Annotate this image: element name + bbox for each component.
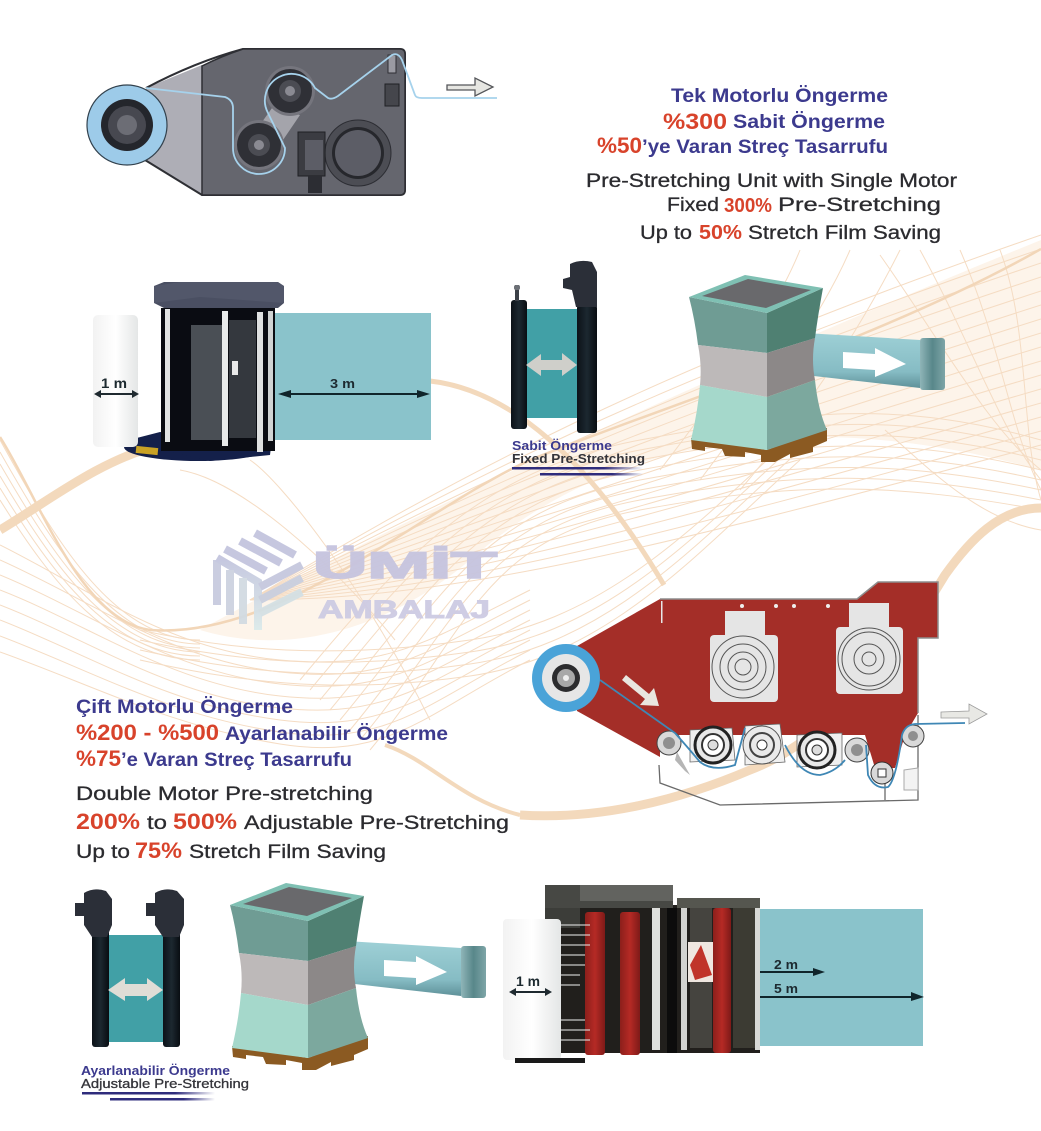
caption: adjustable pre-stretching (81, 1063, 249, 1100)
heading block: single motor (English): Stretch Film Saving (748, 223, 941, 244)
heading block: single motor (English): Up to (640, 223, 692, 244)
panel: wrapper machine with 3 m film (93, 282, 431, 461)
logo watermark: AMBALAJ (318, 596, 490, 624)
heading block: single motor (English): Pre-Stretching (778, 195, 941, 216)
arrow: film in (622, 675, 659, 706)
lower casing outline (659, 715, 918, 805)
film path (600, 680, 965, 788)
caption: adjustable pre-stretching: Ayarlanabilir Öngerme (81, 1063, 230, 1078)
icon: logo cube (217, 533, 302, 630)
caption: fixed pre-stretching (512, 438, 645, 476)
arrow: 1 m (94, 390, 139, 398)
arrow: double (108, 978, 163, 1001)
heading block: single motor (Turkish): %300 (663, 109, 727, 134)
arrow: film out (941, 704, 987, 724)
caption: fixed pre-stretching: Fixed Pre-Stretching (512, 451, 645, 466)
film sheet 5 m (760, 909, 923, 1046)
icon: film roll (87, 85, 167, 165)
label: 3 m: 3 m (330, 376, 355, 391)
arrow: 3 m (278, 390, 430, 398)
heading block: double motor (English): 75% (135, 838, 182, 863)
heading block: double motor (English): Double Motor Pre-stretching (76, 784, 373, 805)
heading block: double motor (Turkish) (76, 697, 448, 771)
logo watermark (217, 533, 498, 630)
red machine: double motor pre-stretching unit (532, 582, 987, 805)
panel: wrapped pallet with film strip, adjustable (230, 883, 486, 1070)
heading block: double motor (Turkish): %200 - %500 (76, 720, 219, 745)
heading block: single motor (Turkish) (597, 86, 888, 158)
logo watermark: ÜMİT (313, 545, 498, 586)
arrow: 5 m (760, 992, 924, 1001)
heading block: double motor (Turkish): Çift Motorlu Öngerme (76, 697, 293, 718)
panel: wrapped pallet with film strip, fixed (689, 275, 945, 462)
warning label (688, 942, 713, 982)
panel: fixed pre-stretching rollers (511, 261, 597, 433)
caption: adjustable pre-stretching: Adjustable Pre-Stretching (81, 1076, 249, 1091)
heading block: double motor (Turkish): %75 (76, 746, 121, 771)
heading block: single motor (English): 300% (724, 195, 772, 217)
panel: double motor machine with 5 m film (503, 885, 924, 1063)
icon: film roll 1 m (93, 315, 138, 447)
heading block: double motor (English): Stretch Film Saving (189, 842, 386, 863)
heading block: double motor (English): Adjustable Pre-Stretching (244, 813, 509, 834)
heading block: double motor (English): Up to (76, 842, 130, 863)
top machine: single motor pre-stretching unit (87, 49, 497, 195)
panel: adjustable pre-stretching rollers (75, 889, 184, 1047)
heading block: single motor (English) (586, 171, 958, 244)
arrow: 1 m (509, 988, 552, 996)
background wave lines (0, 235, 1041, 816)
rollers (657, 724, 924, 784)
heading block: single motor (Turkish): ’ye Varan Streç Tasarrufu (642, 137, 888, 158)
heading block: single motor (Turkish): Tek Motorlu Öngerme (671, 86, 888, 107)
heading block: double motor (Turkish): Ayarlanabilir Öngerme (225, 724, 448, 745)
motor 1 (710, 611, 778, 702)
label: 1 m: 1 m (101, 375, 127, 391)
heading block: double motor (English) (76, 784, 509, 863)
heading block: single motor (English): Pre-Stretching Unit with Single Motor (586, 171, 958, 192)
heading block: double motor (English): 200% (76, 809, 140, 834)
heading block: single motor (English): 50% (699, 222, 742, 244)
label: 1 m: 1 m (516, 973, 540, 989)
heading block: single motor (Turkish): %50 (597, 133, 642, 158)
heading block: single motor (English): Fixed (667, 195, 719, 216)
icon: film roll (532, 644, 600, 712)
motor 2 (836, 603, 903, 694)
caption: fixed pre-stretching: Sabit Öngerme (512, 438, 612, 453)
heading block: double motor (English): 500% (173, 809, 237, 834)
label: 2 m: 2 m (774, 957, 798, 972)
label: 5 m: 5 m (774, 981, 798, 996)
arrow: 2 m (760, 968, 825, 976)
arrow: double (526, 353, 577, 376)
heading block: double motor (English): to (147, 813, 167, 834)
film sheet 3 m (270, 313, 431, 440)
arrow (447, 78, 493, 96)
heading block: double motor (Turkish): ’e Varan Streç Tasarrufu (121, 750, 352, 771)
heading block: single motor (Turkish): Sabit Öngerme (733, 112, 885, 133)
